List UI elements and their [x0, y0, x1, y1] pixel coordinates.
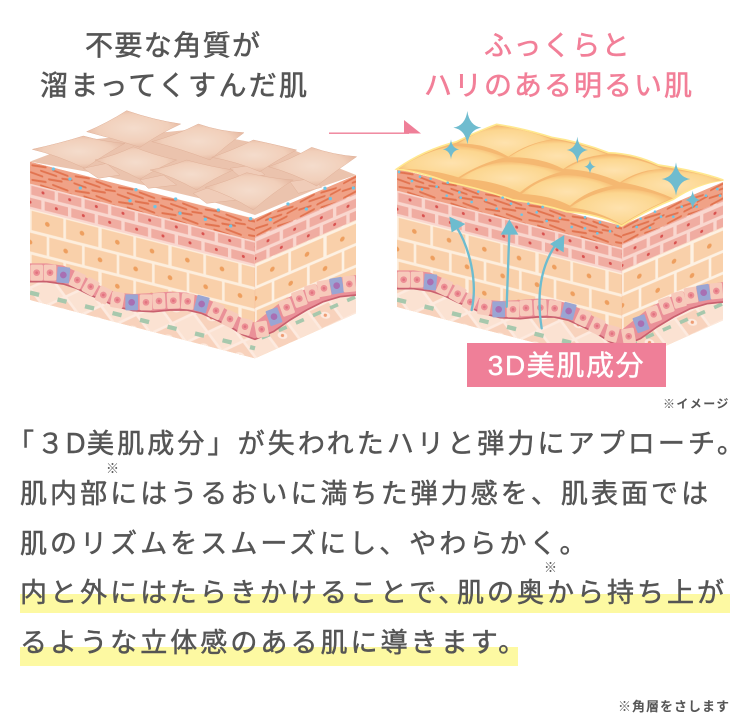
skin flakes: [30, 111, 357, 215]
body text: 美肌成分」が失われたハリと弾力にアプローチ。: [87, 429, 747, 459]
plump surface: [397, 124, 723, 226]
note: image: ※イメージ: [663, 397, 730, 411]
label: 3D beauty ingredient: [467, 343, 666, 387]
lift arrows: [449, 217, 564, 328]
footnote markers: ※: [106, 461, 119, 476]
body text: [7, 429, 747, 658]
sparkles: [443, 111, 700, 209]
footnote markers: ※: [544, 560, 557, 575]
note: stratum corneum: ※角層をさします: [618, 699, 730, 714]
skin diagram: plump skin: [397, 111, 723, 367]
body text: 肌のリズムをスムーズにし、やわらかく。: [20, 529, 590, 559]
body text: 「３Ｄ: [7, 429, 92, 459]
title: dull skin: [40, 30, 309, 101]
label: 3D beauty ingredient: 3D美肌成分: [488, 350, 645, 381]
title: plump skin: ハリのある明るい肌: [424, 70, 694, 101]
title: plump skin: [424, 30, 694, 101]
footnote markers: [106, 461, 557, 575]
highlight bars: [20, 594, 730, 666]
title: dull skin: 不要な角質が: [85, 30, 261, 61]
body text: るような立体感のある肌に導きます。: [20, 628, 528, 658]
skin diagram: rough skin with flakes: [30, 111, 357, 360]
title: plump skin: ふっくらと: [484, 30, 631, 61]
body text: 内と外にはたらきかけることで、: [20, 578, 468, 608]
body text: 肌の奥から持ち上が: [457, 578, 727, 608]
moisture dots: left block: [52, 167, 355, 228]
body text: 肌内部にはうるおいに満ちた弾力感を、肌表面では: [20, 479, 711, 509]
moisture dots: right block: [398, 171, 721, 235]
arrow: [329, 120, 421, 134]
title: dull skin: 溜まってくすんだ肌: [40, 70, 309, 101]
